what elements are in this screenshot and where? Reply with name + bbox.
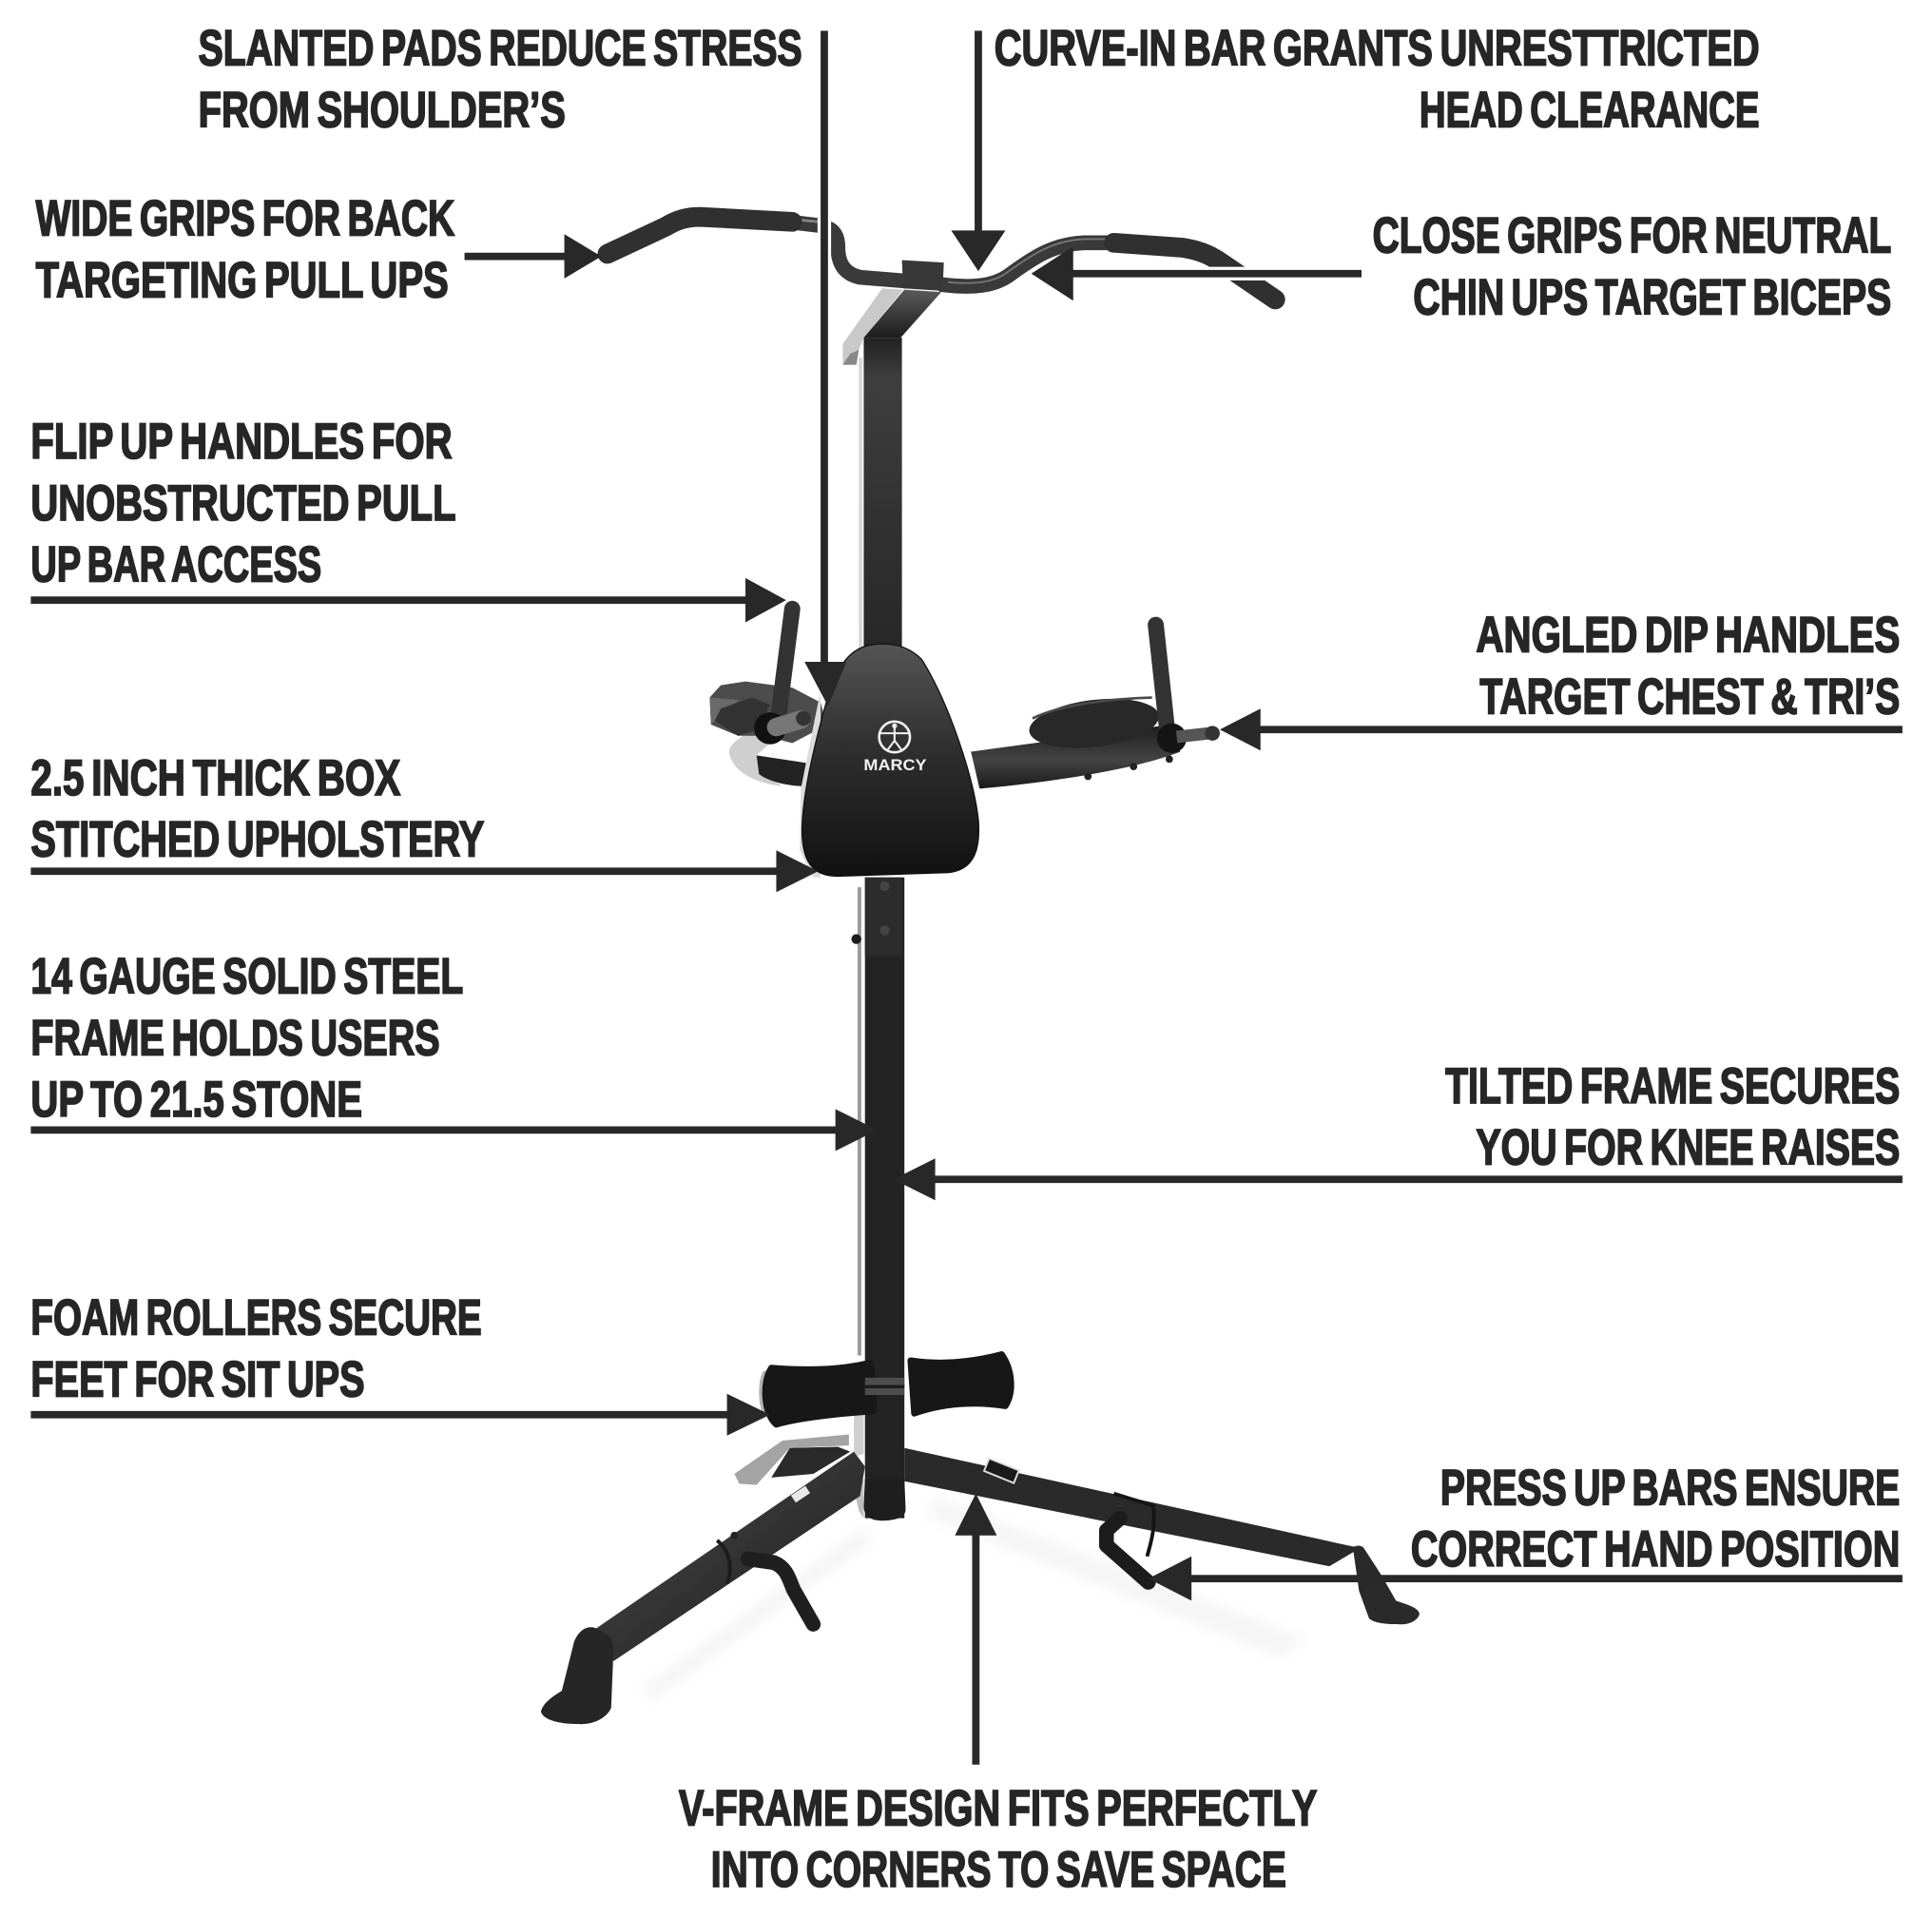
text: foam rollers: FOAM ROLLERS SECURE — [30, 1290, 482, 1346]
text: steel frame: FRAME HOLDS USERS — [30, 1010, 440, 1066]
callout arrow: wide grips — [465, 234, 601, 279]
foot: left — [541, 1627, 613, 1724]
text: close grips — [1373, 208, 1891, 325]
callout arrow: tilted frame — [894, 1158, 1903, 1200]
wide grip bar: left — [608, 217, 905, 281]
callout arrow: press up bars — [1149, 1557, 1903, 1600]
text: steel frame: 14 GAUGE SOLID STEEL — [30, 949, 463, 1005]
foam rollers — [759, 1354, 1011, 1424]
logo emblem — [879, 722, 910, 752]
callout arrow: steel frame — [30, 1109, 878, 1151]
text: press up bars — [1411, 1460, 1900, 1578]
text: wide grips — [36, 191, 454, 308]
base leg: right — [904, 1448, 1362, 1582]
text: angled dip handles — [1477, 608, 1900, 725]
dip handle: left — [709, 609, 825, 786]
text: flip up handles — [30, 414, 455, 593]
equipment: power tower illustration — [541, 217, 1420, 1724]
back pad — [800, 644, 978, 878]
callout arrow: curve-in bar — [951, 30, 1005, 271]
post: upper column — [859, 338, 902, 670]
callout arrow: foam rollers — [30, 1394, 770, 1436]
callout arrow: v-frame — [955, 1494, 996, 1765]
floor shadows — [641, 1498, 1306, 1700]
rear silver bracket — [734, 1411, 863, 1519]
callout arrow: flip up handles — [30, 578, 786, 622]
text: slanted pads: SLANTED PADS REDUCE STRESS — [199, 21, 802, 77]
text: flip up handles: UNOBSTRUCTED PULL — [30, 475, 455, 532]
callout arrow: upholstery — [30, 850, 818, 892]
callout arrow: close grips — [1032, 246, 1362, 300]
text: steel frame — [30, 949, 463, 1128]
callout arrow: slanted pads — [804, 30, 846, 707]
text: foam rollers: FEET FOR SIT UPS — [30, 1351, 365, 1407]
text: v-frame — [679, 1780, 1317, 1898]
text: upholstery: STITCHED UPHOLSTERY — [30, 812, 484, 868]
base leg: left — [595, 1452, 865, 1661]
foot: right — [1353, 1545, 1420, 1624]
text: flip up handles: UP BAR ACCESS — [30, 537, 321, 593]
text: flip up handles: FLIP UP HANDLES FOR — [30, 414, 453, 470]
post: lower column — [851, 878, 905, 1520]
callout arrow: angled dip handles — [1220, 708, 1903, 750]
text: steel frame: UP TO 21.5 STONE — [30, 1072, 362, 1128]
text: curve-in bar: HEAD CLEARANCE — [1420, 83, 1760, 139]
text: slanted pads: FROM SHOULDER’S — [199, 83, 566, 139]
text: slanted pads — [199, 21, 802, 139]
text: upholstery: 2.5 INCH THICK BOX — [30, 750, 400, 806]
logo wordmark: MARCY — [863, 756, 927, 774]
dip handle: right — [971, 625, 1220, 788]
text: curve-in bar — [995, 21, 1760, 139]
text: v-frame: INTO CORNERS TO SAVE SPACE — [711, 1842, 1286, 1898]
text: wide grips: WIDE GRIPS FOR BACK — [36, 191, 454, 247]
bar clamp block — [902, 260, 944, 291]
text: foam rollers — [30, 1290, 482, 1407]
text: wide grips: TARGETING PULL UPS — [36, 252, 449, 308]
text: tilted frame — [1445, 1058, 1900, 1176]
close grip bar: right — [942, 239, 1275, 300]
text: v-frame: V-FRAME DESIGN FITS PERFECTLY — [679, 1780, 1317, 1836]
top brace — [842, 288, 941, 365]
text: upholstery — [30, 750, 484, 868]
